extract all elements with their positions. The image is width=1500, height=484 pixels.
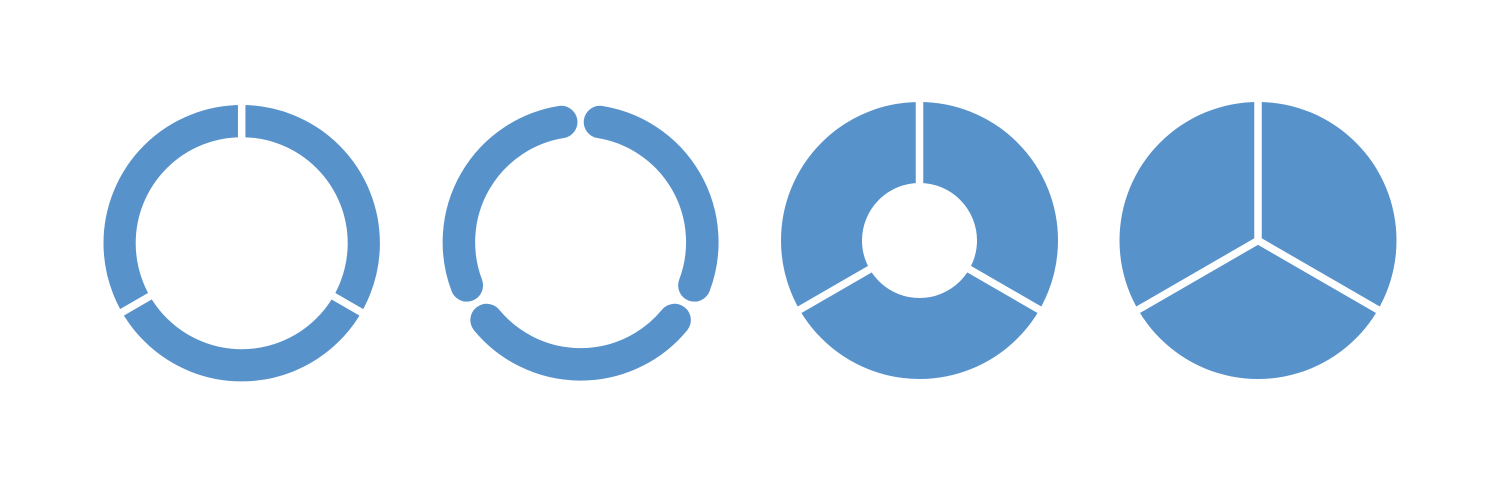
pie divided into three segments — [1120, 98, 1396, 379]
bottom rounded arc — [487, 320, 675, 364]
left rounded arc — [459, 122, 561, 285]
thick ring divided into three segments — [796, 98, 1043, 338]
thin ring divided into three segments — [118, 100, 365, 365]
ring of three segments with rounded ends — [459, 122, 702, 364]
right rounded arc — [600, 122, 702, 285]
